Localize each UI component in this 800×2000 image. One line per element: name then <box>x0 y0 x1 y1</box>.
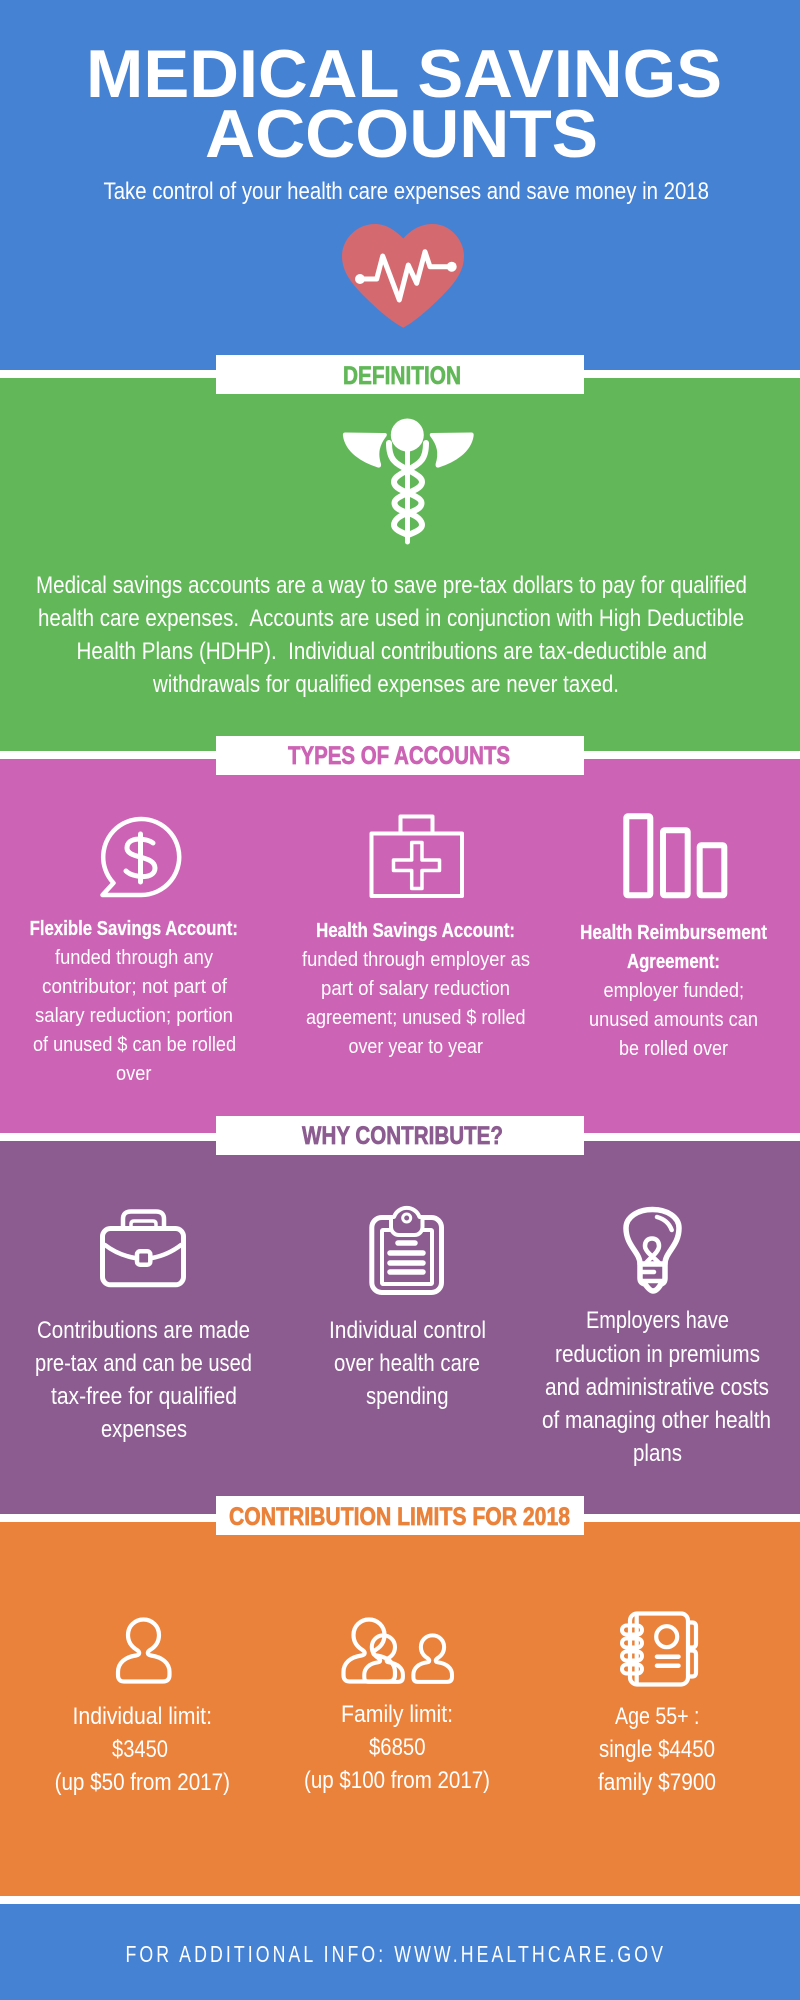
icon: family <box>344 1620 452 1682</box>
text: health savings account: part of salary reduction <box>321 978 510 1000</box>
text: pre-tax contributions: tax-free for qualified <box>51 1383 237 1410</box>
text: flexible savings account: Flexible Savings Account: <box>30 918 238 940</box>
icon: bars <box>626 816 724 895</box>
title: ACCOUNTS <box>205 96 598 172</box>
icon: first aid kit <box>372 816 462 896</box>
text: employers: plans <box>633 1440 682 1467</box>
text: flexible savings account: salary reduction; portion <box>35 1005 233 1027</box>
text: age 55+ limit: single $4450 <box>599 1736 715 1763</box>
text: pre-tax contributions: pre-tax and can be used <box>35 1350 252 1377</box>
text: individual control: spending <box>366 1383 448 1410</box>
icon: briefcase <box>102 1212 184 1285</box>
text: individual control <box>329 1317 486 1410</box>
text: flexible savings account: contributor; not part of <box>42 976 227 998</box>
text: individual control: over health care <box>334 1350 480 1377</box>
text: family limit: Family limit: <box>341 1701 453 1728</box>
heading: definition: DEFINITION <box>343 362 461 390</box>
text: health savings account: funded through employer as <box>302 949 530 971</box>
icon: heart with pulse <box>342 224 464 328</box>
text: employers: of managing other health <box>542 1407 771 1434</box>
text: employers <box>542 1307 771 1467</box>
text: health reimbursement agreement <box>580 922 767 1060</box>
text: pre-tax contributions: expenses <box>101 1416 187 1443</box>
text: definition paragraph: withdrawals for qualified expenses are never taxed. <box>152 671 619 698</box>
heading: contribution limits <box>216 1496 584 1535</box>
text: health reimbursement agreement: Health Reimbursement <box>580 922 767 944</box>
heading: why contribute <box>216 1116 584 1155</box>
text: family limit: (up $100 from 2017) <box>304 1767 490 1794</box>
heading: definition <box>216 355 584 394</box>
text: individual control: Individual control <box>329 1317 486 1344</box>
heading: types of accounts <box>216 736 584 775</box>
heading: contribution limits: CONTRIBUTION LIMITS FOR 2018 <box>229 1503 570 1531</box>
heading: why contribute: WHY CONTRIBUTE? <box>302 1122 503 1150</box>
text: age 55+ limit: Age 55+ : <box>615 1703 700 1730</box>
text: pre-tax contributions <box>35 1317 252 1443</box>
text: health reimbursement agreement: be rolled over <box>619 1038 728 1060</box>
text: flexible savings account: over <box>116 1063 152 1085</box>
text: employers: reduction in premiums <box>555 1341 760 1368</box>
text: definition paragraph: Health Plans (HDHP). Individual contributions are tax-deductible and <box>76 638 707 665</box>
text: health reimbursement agreement: employer funded; <box>604 980 744 1002</box>
text: family limit <box>304 1701 490 1794</box>
text: health savings account <box>302 920 530 1058</box>
text: age 55+ limit: family $7900 <box>598 1769 716 1796</box>
title: MEDICAL SAVINGS <box>86 36 722 112</box>
text: flexible savings account <box>30 918 238 1085</box>
icon: light bulb <box>626 1210 679 1291</box>
text: age 55+ limit <box>598 1703 716 1796</box>
text: family limit: $6850 <box>369 1734 426 1761</box>
icon: caduceus <box>343 418 473 542</box>
text: health reimbursement agreement: unused amounts can <box>589 1009 758 1031</box>
icon: person <box>118 1620 170 1682</box>
text: individual limit <box>55 1703 230 1796</box>
text: definition paragraph <box>36 572 747 698</box>
icon: address book <box>622 1614 696 1684</box>
subtitle: Take control of your health care expenses and save money in 2018 <box>104 178 709 205</box>
panel: header <box>0 0 800 370</box>
text: employers: and administrative costs <box>545 1374 769 1401</box>
heading: types of accounts: TYPES OF ACCOUNTS <box>288 742 510 770</box>
text: individual limit: (up $50 from 2017) <box>55 1769 230 1796</box>
text: pre-tax contributions: Contributions are made <box>37 1317 250 1344</box>
panel: contribution limits <box>0 1496 800 1896</box>
icon: dollar speech bubble <box>102 819 179 895</box>
text: individual limit: $3450 <box>112 1736 168 1763</box>
text: health savings account: over year to year <box>348 1036 483 1058</box>
icon: clipboard <box>372 1208 442 1292</box>
text: health savings account: agreement; unused $ rolled <box>306 1007 526 1029</box>
panel: why contribute <box>0 1116 800 1514</box>
panel: footer <box>0 1896 800 2000</box>
text: flexible savings account: funded through any <box>55 947 213 969</box>
title <box>86 36 722 172</box>
text: individual limit: Individual limit: <box>72 1703 212 1730</box>
text: flexible savings account: of unused $ can be rolled <box>33 1034 236 1056</box>
text: employers: Employers have <box>586 1307 729 1334</box>
text: health reimbursement agreement: Agreement: <box>627 951 720 973</box>
text: health savings account: Health Savings Account: <box>316 920 515 942</box>
panel: types of accounts <box>0 736 800 1133</box>
panel: definition <box>0 355 800 751</box>
